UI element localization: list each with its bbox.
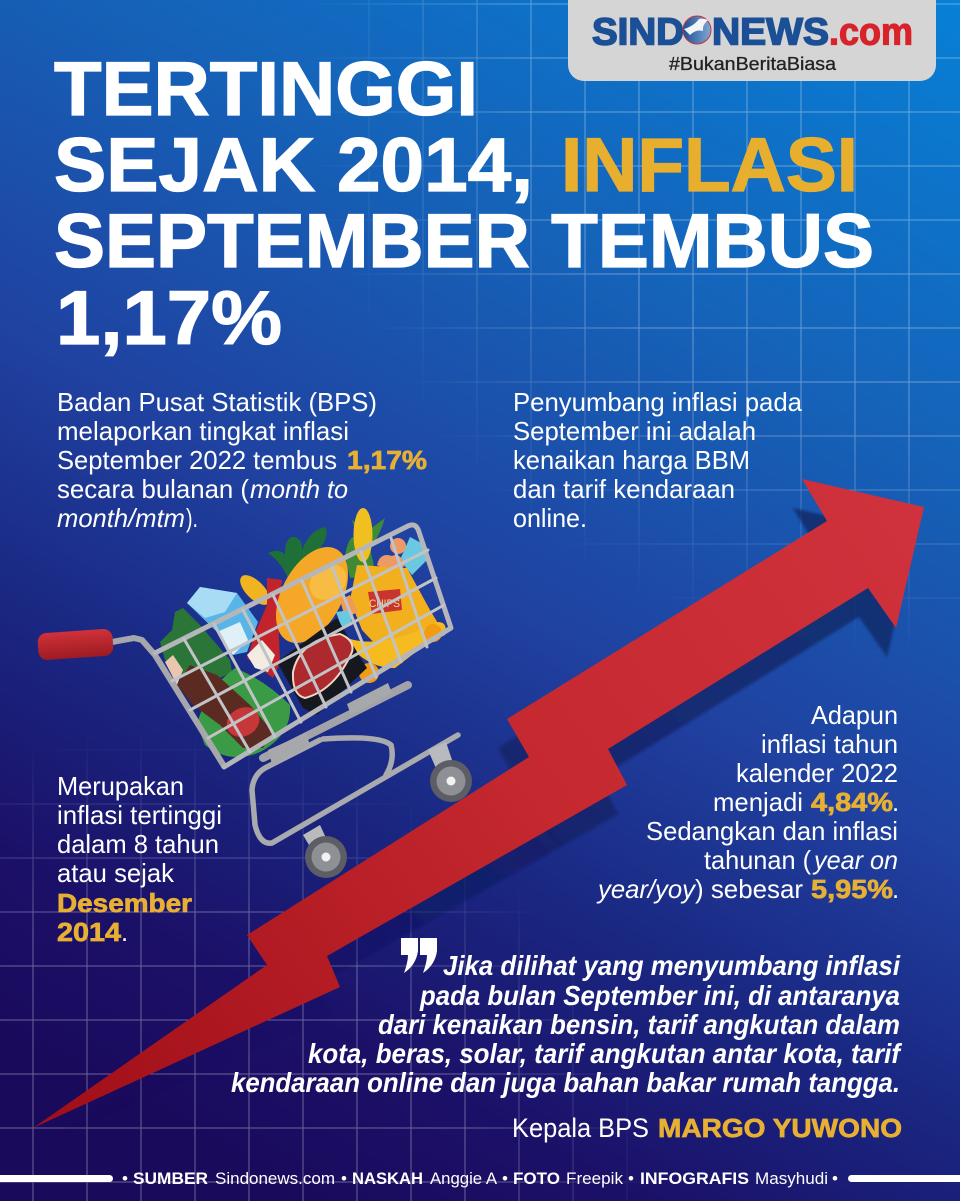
quote — [231, 950, 903, 1098]
text block: BPS report: month to — [250, 476, 348, 504]
logo panel — [568, 0, 936, 81]
arrow shadow — [24, 508, 915, 1157]
footer credits: FOTO — [513, 1169, 560, 1188]
icon: shopping cart — [37, 508, 472, 878]
footer credits: • — [341, 1169, 347, 1188]
footer credits: Anggie A — [430, 1169, 498, 1188]
quote: pada bulan September ini, di antaranya — [419, 980, 900, 1011]
text block: contributors: Penyumbang inflasi pada — [513, 389, 803, 417]
text block: calendar and yearly inflation: 5,95% — [811, 876, 893, 904]
text block: contributors: kenaikan harga BBM — [513, 447, 750, 475]
footer credits: Sindonews.com — [215, 1169, 335, 1188]
quote: Jika dilihat yang menyumbang inflasi — [443, 950, 901, 981]
footer credits: • — [628, 1169, 634, 1188]
text block: calendar and yearly inflation: year/yoy — [596, 876, 697, 904]
text block: calendar and yearly inflation: . — [892, 876, 899, 904]
text block: contributors — [513, 389, 803, 533]
text block: calendar and yearly inflation: menjadi — [713, 789, 803, 817]
quote attribution: MARGO YUWONO — [658, 1113, 902, 1143]
logo wordmark: SIND — [592, 12, 684, 54]
text block: highest in 8 years — [57, 773, 222, 947]
text block: calendar and yearly inflation: ) sebesar — [695, 876, 803, 904]
logo wordmark: .com — [829, 12, 913, 54]
logo wordmark — [592, 12, 913, 54]
text block: BPS report: secara bulanan ( — [57, 476, 249, 504]
text block: highest in 8 years: 2014 — [57, 919, 122, 947]
footer credits: INFOGRAFIS — [640, 1169, 749, 1188]
title: SEJAK 2014, — [54, 123, 533, 208]
logo tagline: #BukanBeritaBiasa — [669, 54, 837, 74]
text block: contributors: online. — [513, 505, 587, 533]
title: 1,17% — [56, 276, 282, 361]
cart handle — [37, 628, 114, 661]
quote: kota, beras, solar, tarif angkutan antar kota, tarif — [308, 1038, 903, 1069]
logo wordmark: NEWS — [712, 12, 829, 54]
title: SEPTEMBER TEMBUS — [54, 199, 874, 284]
quote: kendaraan online dan juga bahan bakar rumah tangga. — [231, 1067, 900, 1098]
footer credits: • — [502, 1169, 508, 1188]
text block: BPS report: September 2022 tembus — [57, 447, 337, 475]
text block: highest in 8 years: . — [121, 919, 128, 947]
footer credits: Masyhudi — [755, 1169, 828, 1188]
footer credits: NASKAH — [352, 1169, 423, 1188]
text block: calendar and yearly inflation: Sedangkan dan inflasi — [646, 818, 898, 846]
text block: BPS report — [57, 389, 427, 533]
footer credits — [0, 1169, 960, 1188]
text block: contributors: September ini adalah — [513, 418, 756, 446]
quote attribution: Kepala BPS — [512, 1113, 649, 1143]
text block: calendar and yearly inflation: kalender 2022 — [736, 760, 898, 788]
cart wheels — [303, 742, 472, 878]
text block: BPS report: ). — [186, 505, 198, 533]
text block: highest in 8 years: inflasi tertinggi — [57, 802, 222, 830]
text block: BPS report: Badan Pusat Statistik (BPS) — [57, 389, 377, 417]
title: INFLASI — [561, 123, 858, 208]
footer credits: • — [832, 1169, 838, 1188]
title: TERTINGGI — [54, 47, 478, 132]
text block: BPS report: month/mtm — [57, 505, 185, 533]
footer credits: • — [122, 1169, 128, 1188]
text block: calendar and yearly inflation: . — [892, 789, 899, 817]
text block: calendar and yearly inflation: year on — [812, 847, 898, 875]
text block: calendar and yearly inflation: inflasi tahun — [761, 731, 898, 759]
text block: calendar and yearly inflation: Adapun — [811, 702, 898, 730]
text block: highest in 8 years: atau sejak — [57, 860, 174, 888]
quote: dari kenaikan bensin, tarif angkutan dalam — [378, 1009, 900, 1040]
quote attribution — [512, 1113, 902, 1143]
text block: calendar and yearly inflation: 4,84% — [811, 789, 893, 817]
icon: quotation mark — [401, 938, 437, 973]
text block: highest in 8 years: Merupakan — [57, 773, 184, 801]
cart groceries — [160, 508, 446, 757]
text block: BPS report: 1,17% — [347, 447, 427, 475]
red rising arrow — [33, 479, 924, 1128]
text block: calendar and yearly inflation — [596, 702, 899, 904]
text block: highest in 8 years: Desember — [57, 890, 192, 918]
footer credits: Freepik — [566, 1169, 624, 1188]
text block: calendar and yearly inflation: tahunan ( — [704, 847, 811, 875]
cart groceries: CHIPS — [369, 598, 400, 610]
title — [54, 47, 874, 361]
text block: BPS report: melaporkan tingkat inflasi — [57, 418, 349, 446]
cart frame — [112, 525, 458, 843]
text block: contributors: dan tarif kendaraan — [513, 476, 735, 504]
text block: highest in 8 years: dalam 8 tahun — [57, 831, 219, 859]
footer credits: SUMBER — [133, 1169, 208, 1188]
